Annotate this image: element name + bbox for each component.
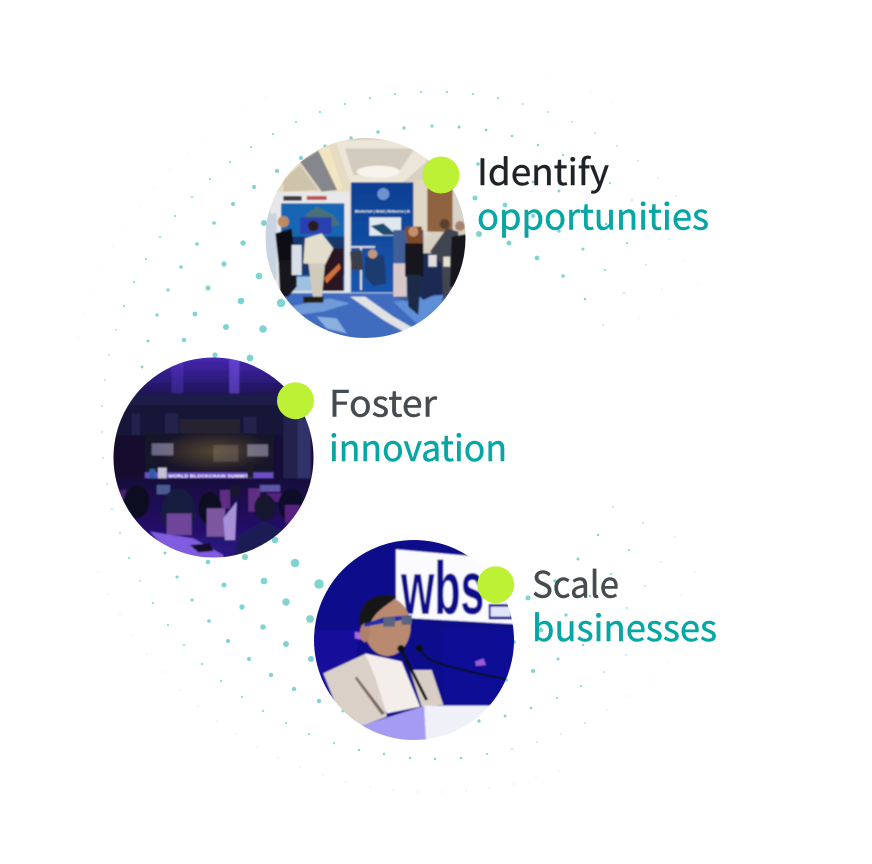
photo: speaker at podium <box>314 540 514 740</box>
photo: speaker at podium: wbs <box>400 546 484 630</box>
icon: green dot <box>422 156 460 194</box>
heading: Identify: Identify <box>477 144 609 196</box>
background halftone dot pattern <box>78 74 698 793</box>
photo: conference stage <box>114 358 314 558</box>
photo: conference stage: WORLD BLOCKCHAIN SUMMIT <box>168 473 248 479</box>
panel: foster innovation <box>114 358 504 558</box>
heading: opportunities: opportunities <box>477 188 709 240</box>
heading: Scale: Scale <box>532 557 619 609</box>
icon: green dot <box>277 382 314 419</box>
photo: exhibition booths: Blockchain | Web3 | Metaverse | AI <box>355 210 410 214</box>
panel: identify opportunities <box>266 138 708 338</box>
icon: green dot <box>477 566 514 603</box>
heading: businesses: businesses <box>532 600 717 652</box>
photo: exhibition booths <box>266 138 466 338</box>
heading: innovation: innovation <box>329 420 507 472</box>
heading: Foster: Foster <box>329 376 438 428</box>
panel: scale businesses <box>314 540 716 740</box>
